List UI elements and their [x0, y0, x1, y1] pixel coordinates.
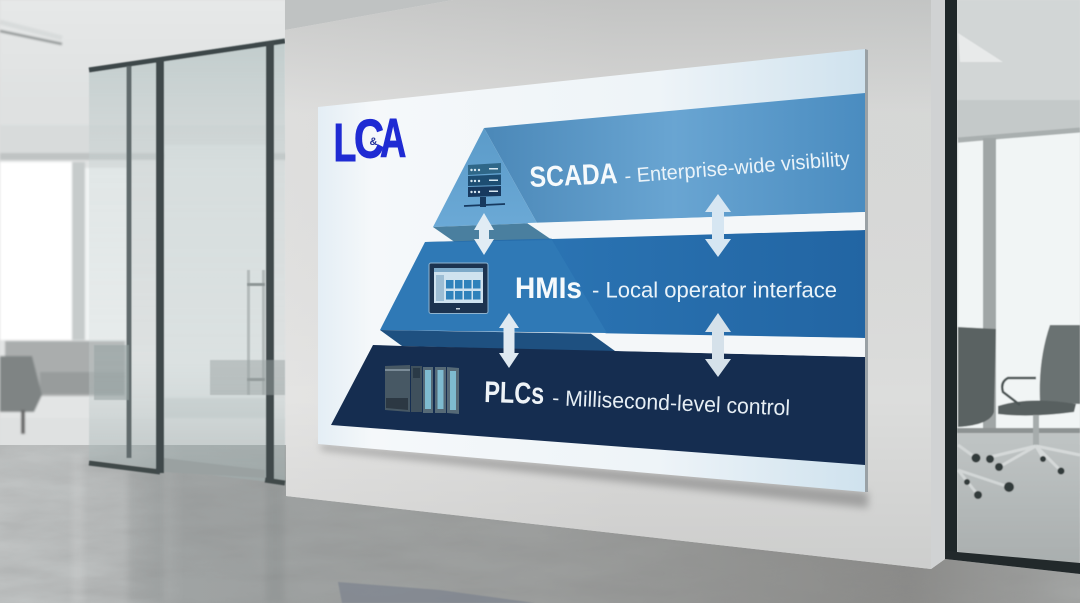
panel: wall board [318, 49, 868, 492]
logo: LC&A: A [380, 107, 406, 168]
background: ceiling above wall [285, 0, 453, 30]
arrow: HMI to PLC icon side [499, 313, 519, 368]
label: SCADA: SCADA [529, 158, 618, 194]
label: PLCs: PLCs [484, 376, 545, 411]
arrow: SCADA to HMI icon side [474, 213, 494, 255]
background: main wall [285, 0, 945, 569]
chair: dark meeting chair [958, 327, 1014, 499]
background: right meeting room [957, 0, 1080, 566]
tier: HMI band [380, 230, 865, 352]
tier: light step edges [527, 212, 865, 357]
background: glass partition and door [89, 38, 285, 484]
logo: LC&A: L [334, 112, 356, 173]
tier: SCADA band [433, 93, 865, 243]
logo: LC&A [334, 107, 406, 173]
label: HMIs description: - Local operator interface [592, 278, 837, 302]
background: floor [0, 445, 1080, 603]
tier: PLC band [331, 345, 865, 465]
label: SCADA description: - Enterprise-wide visibility [624, 147, 851, 188]
background: left office room [0, 0, 286, 462]
door frame: right glass door [945, 0, 1080, 574]
label: PLCs description: - Millisecond-level control [552, 385, 791, 420]
chair: grey office chair [986, 325, 1080, 474]
arrow: SCADA to HMI right side [705, 194, 731, 257]
icon: PLC rack [385, 365, 459, 414]
logo: LC&A: & [370, 136, 378, 148]
logo: LC&A: C [354, 109, 384, 170]
arrow: HMI to PLC right side [705, 313, 731, 377]
board shadow [320, 444, 868, 508]
label: HMIs: HMIs [515, 272, 582, 305]
icon: HMI touch panel [429, 263, 488, 314]
icon: server rack [464, 163, 505, 207]
